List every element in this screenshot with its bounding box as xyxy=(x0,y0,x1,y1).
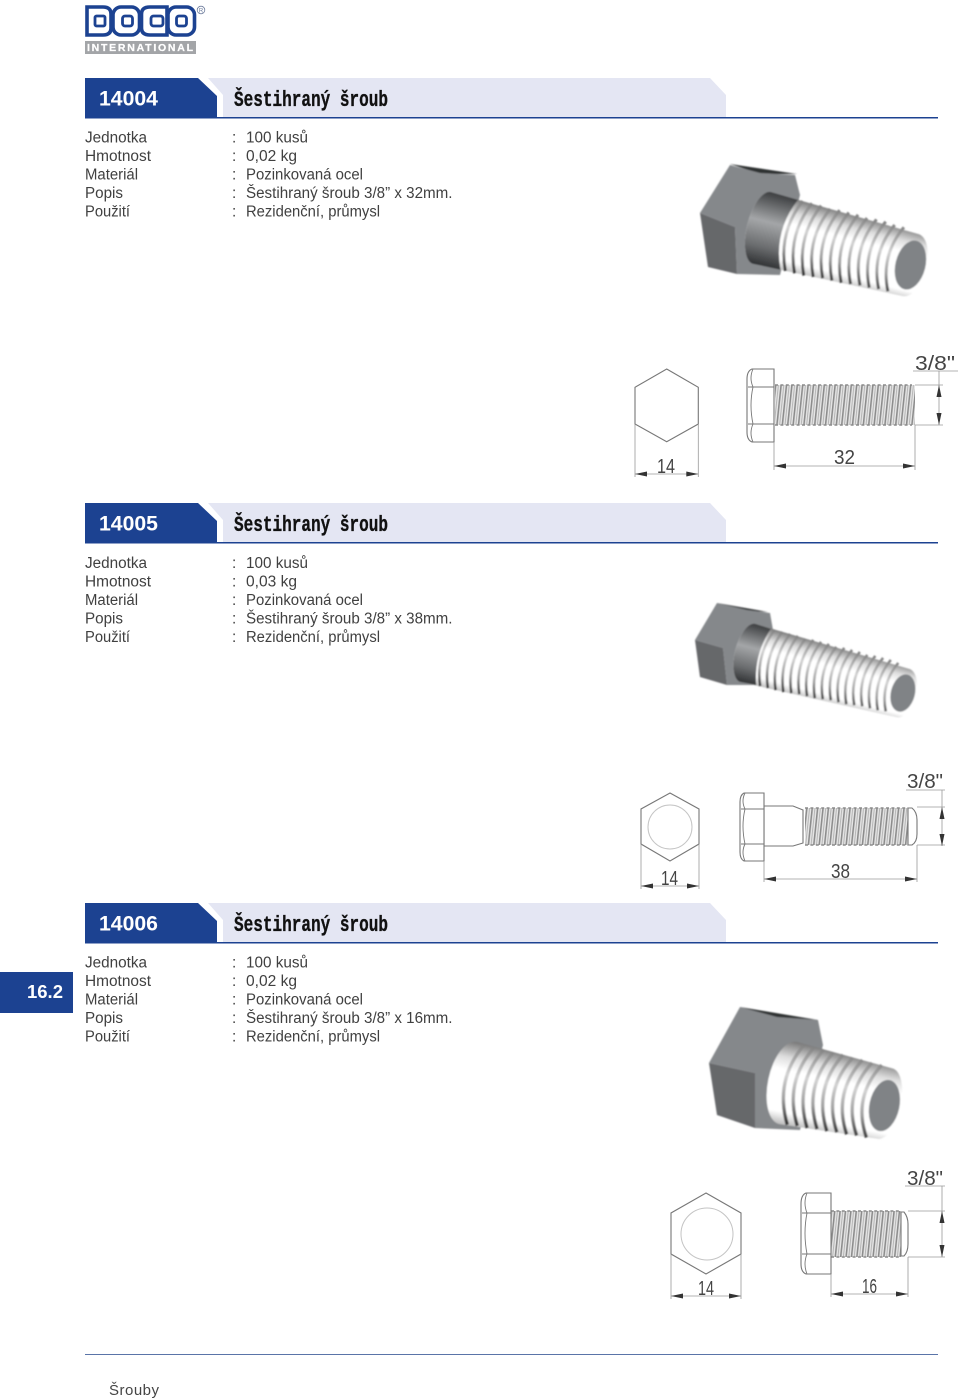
specification list 14004: 100 kusů xyxy=(246,130,308,146)
specification list 14004: Šestihraný šroub 3/8” x 32mm. xyxy=(246,185,452,202)
specification list 14004: : xyxy=(232,148,236,165)
technical drawing: side view 14006 xyxy=(801,1168,945,1298)
specification list 14006: Rezidenční, průmysl xyxy=(246,1028,380,1046)
specification list 14005: : xyxy=(232,574,236,590)
specification list 14006: Jednotka xyxy=(85,954,147,972)
specification list 14005 xyxy=(85,555,452,646)
specification list 14004: Popis xyxy=(85,185,123,202)
technical drawing: hex view 14006 xyxy=(671,1193,741,1300)
technical drawing: hex view 14005 xyxy=(641,793,699,890)
header band 14005: 14005 xyxy=(99,512,158,536)
technical drawing: side view 14006: 16 xyxy=(862,1276,877,1298)
specification list 14004: Materiál xyxy=(85,166,138,184)
technical drawing: side view 14005 xyxy=(740,771,945,883)
specification list 14005: : xyxy=(232,610,236,628)
technical drawing: side view 14006: 3/8" xyxy=(907,1168,943,1190)
specification list 14006: : xyxy=(232,1010,236,1027)
logo: DOCO International: R xyxy=(199,8,204,14)
specification list 14006: : xyxy=(232,1028,236,1046)
specification list 14005: 0,03 kg xyxy=(246,574,297,590)
specification list 14004: : xyxy=(232,166,236,184)
technical drawing: hex view 14004 xyxy=(635,369,698,478)
technical drawing: hex view 14005: 14 xyxy=(661,868,678,890)
specification list 14004: Použití xyxy=(85,204,131,220)
technical drawing: side view 14005: 38 xyxy=(831,861,850,883)
header band 14004: Šestihraný šroub xyxy=(234,87,388,113)
header band 14004: 14004 xyxy=(99,88,158,110)
specification list 14006: : xyxy=(232,954,236,972)
footer: Šrouby xyxy=(109,1382,160,1399)
specification list 14005: Rezidenční, průmysl xyxy=(246,629,380,646)
specification list 14004: Hmotnost xyxy=(85,148,152,165)
specification list 14006: 100 kusů xyxy=(246,954,308,972)
specification list 14004 xyxy=(85,130,452,220)
specification list 14006: Hmotnost xyxy=(85,973,152,990)
header band 14004 xyxy=(85,78,938,118)
specification list 14004: Pozinkovaná ocel xyxy=(246,166,363,184)
specification list 14005: : xyxy=(232,555,236,572)
specification list 14006: : xyxy=(232,973,236,990)
specification list 14004: : xyxy=(232,185,236,202)
section tab 16.2: 16.2 xyxy=(27,981,63,1002)
technical drawing: side view 14004: 32 xyxy=(834,447,855,469)
specification list 14006: Materiál xyxy=(85,992,138,1008)
header band 14006: 14006 xyxy=(99,912,158,936)
section tab 16.2 xyxy=(0,972,73,1013)
specification list 14006: Pozinkovaná ocel xyxy=(246,992,363,1008)
technical drawing: hex view 14006: 14 xyxy=(698,1278,714,1300)
specification list 14004: : xyxy=(232,130,236,146)
specification list 14005: Jednotka xyxy=(85,555,147,572)
technical drawing: side view 14004 xyxy=(747,353,958,470)
header band 14006 xyxy=(85,903,938,944)
specification list 14004: Jednotka xyxy=(85,130,147,146)
specification list 14004: Rezidenční, průmysl xyxy=(246,204,380,220)
header band 14005: Šestihraný šroub xyxy=(234,512,388,538)
panel: product 14004 xyxy=(85,78,958,478)
specification list 14004: 0,02 kg xyxy=(246,148,297,165)
specification list 14006 xyxy=(85,954,452,1046)
logo: DOCO International xyxy=(85,6,205,54)
specification list 14005: Použití xyxy=(85,629,131,646)
specification list 14005: : xyxy=(232,629,236,646)
header band 14005 xyxy=(85,503,938,544)
specification list 14005: Popis xyxy=(85,610,123,628)
specification list 14006: 0,02 kg xyxy=(246,973,297,990)
specification list 14005: : xyxy=(232,592,236,609)
specification list 14006: Popis xyxy=(85,1010,123,1027)
specification list 14005: Pozinkovaná ocel xyxy=(246,592,363,609)
specification list 14005: Hmotnost xyxy=(85,574,152,590)
3D bolt illustration 14006 xyxy=(709,1007,909,1148)
3D bolt illustration 14005 xyxy=(695,603,923,725)
panel: product 14005 xyxy=(85,503,945,890)
specification list 14004: : xyxy=(232,204,236,220)
technical drawing: hex view 14004: 14 xyxy=(657,456,675,478)
specification list 14006: : xyxy=(232,992,236,1008)
specification list 14005: Šestihraný šroub 3/8” x 38mm. xyxy=(246,610,452,628)
panel: product 14006 xyxy=(85,903,945,1300)
specification list 14005: Materiál xyxy=(85,592,138,609)
technical drawing: side view 14004: 3/8" xyxy=(915,353,955,375)
specification list 14006: Šestihraný šroub 3/8” x 16mm. xyxy=(246,1010,452,1027)
specification list 14005: 100 kusů xyxy=(246,555,308,572)
technical drawing: side view 14005: 3/8" xyxy=(907,771,943,793)
specification list 14006: Použití xyxy=(85,1028,131,1046)
logo: DOCO International: INTERNATIONAL xyxy=(87,42,194,54)
header band 14006: Šestihraný šroub xyxy=(234,912,388,938)
3D bolt illustration 14004 xyxy=(700,164,935,305)
